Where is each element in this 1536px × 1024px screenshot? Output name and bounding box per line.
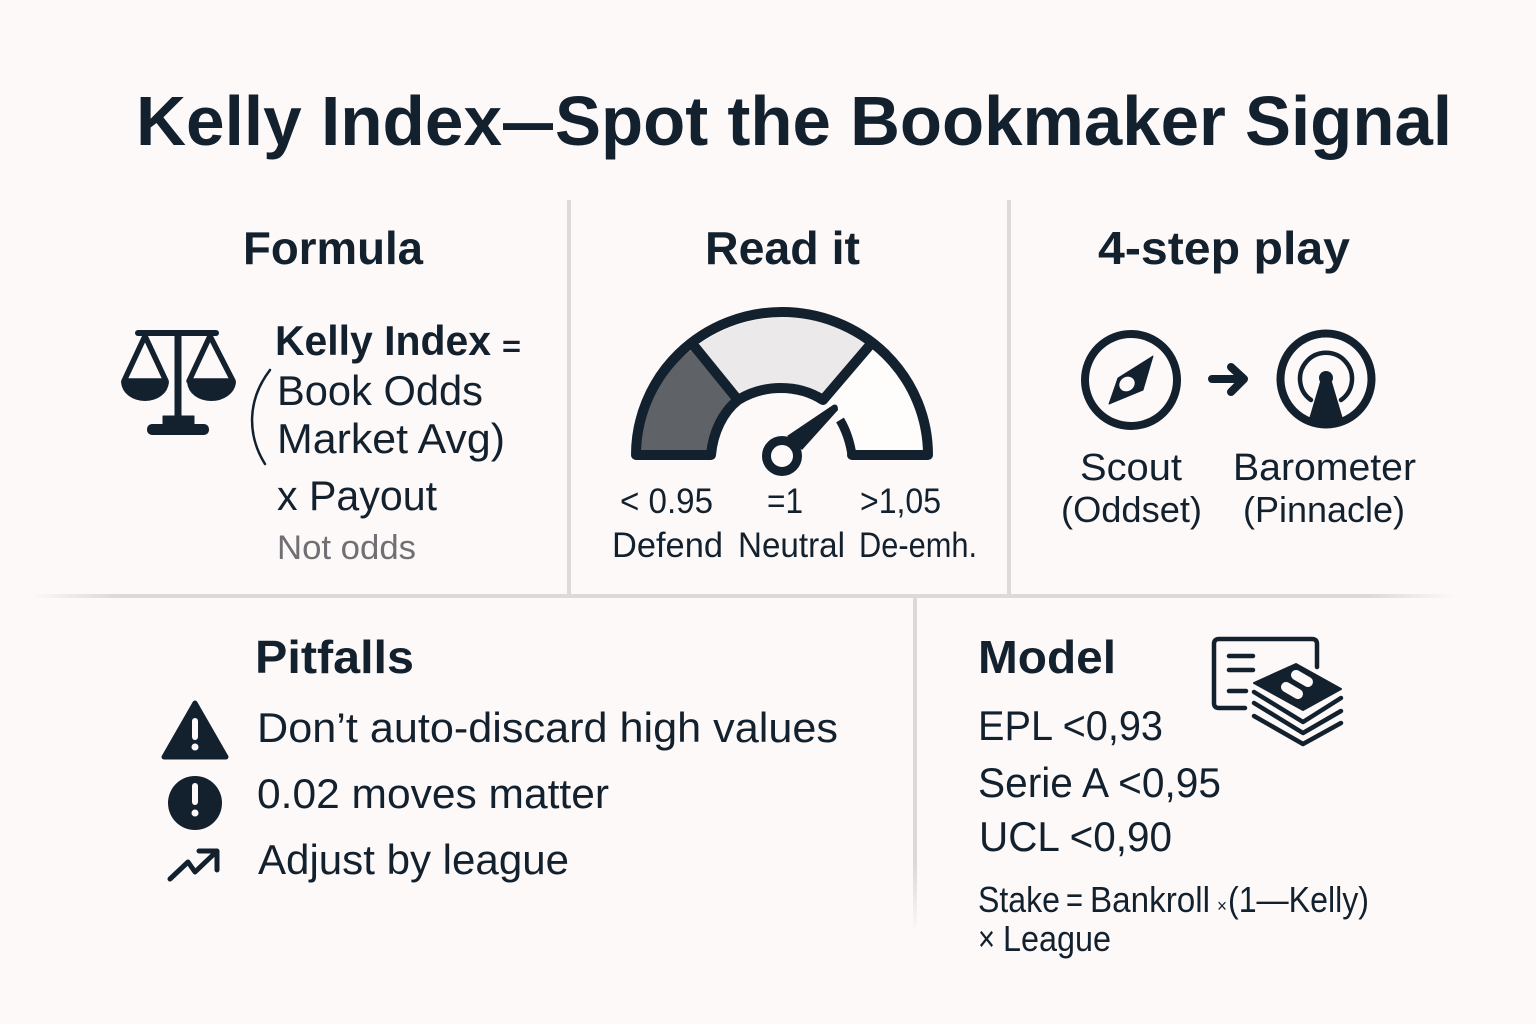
heading: model: Model [978,631,1116,683]
pitfall text: 0.02 moves matter [257,770,609,817]
stake formula [978,879,1369,959]
gauge chart [636,312,928,472]
pitfall text: Don’t auto-discard high values [257,704,838,751]
formula text [275,317,521,519]
note: not odds: Not odds [277,529,416,567]
heading: 4-step play: 4-step play [1098,222,1350,274]
panel: 4-step play [1061,222,1416,530]
title: Kelly Index [136,82,502,160]
title: Spot the Bookmaker Signal [555,82,1452,160]
icon: trend arrow [170,851,217,879]
icon: warning triangle [164,703,226,757]
pitfall text: Adjust by league [258,836,569,883]
icon: ledger and cash stack [1214,639,1341,744]
gauge labels [612,482,977,565]
gauge labels: < 0.95 [620,482,713,521]
panel: formula [122,222,521,567]
step labels: Barometer [1233,447,1416,489]
gauge needle [766,405,838,472]
icon: exclamation circle [168,776,222,830]
panel: model [978,631,1369,959]
gauge labels: =1 [767,482,803,521]
league thresholds: UCL <0,90 [979,813,1172,860]
stake formula: (1—Kelly) [1228,879,1369,920]
stake formula: Stake [978,879,1060,920]
icon: barometer [1280,334,1372,424]
stake formula: = [1066,879,1083,920]
gauge labels: >1,05 [860,482,941,521]
heading: formula: Formula [243,222,423,274]
step labels [1061,447,1416,530]
formula text: Market Avg) [277,415,505,462]
arrow [1212,367,1244,392]
title [136,82,1452,160]
step labels: (Pinnacle) [1243,489,1405,530]
league thresholds [978,702,1221,860]
stake formula: League [1003,918,1111,959]
league thresholds: Serie A <0,95 [978,759,1221,806]
bracket [252,370,270,464]
heading: pitfalls: Pitfalls [255,631,414,683]
icon: compass [1085,334,1177,426]
formula text: x Payout [277,472,437,519]
panel: pitfalls [164,631,838,883]
heading: read it: Read it [705,222,860,274]
step labels: Scout [1080,447,1182,489]
icon: balance scale [122,333,235,435]
formula text: Kelly Index [275,317,492,364]
stake formula: × [1217,896,1227,916]
formula text: = [502,330,521,363]
panel: read it [612,222,977,565]
gauge labels: Defend [612,526,723,565]
step labels: (Oddset) [1061,489,1202,530]
formula text: Book Odds [277,367,483,414]
title: — [503,82,553,160]
league thresholds: EPL <0,93 [978,702,1163,749]
stake formula: × [978,918,995,959]
stake formula: Bankroll [1090,879,1210,920]
gauge labels: Neutral [738,526,845,565]
gauge labels: De-emh. [859,526,977,565]
